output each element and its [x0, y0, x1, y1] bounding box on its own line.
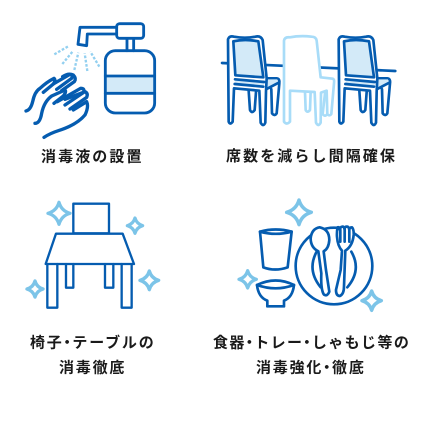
icon: plate and cutlery	[296, 227, 372, 304]
heading: disinfectant: 消毒液の設置	[41, 148, 144, 166]
panel: seats	[222, 36, 397, 165]
icon: cup	[260, 229, 292, 269]
heading: table line 1: 椅子・テーブルの	[30, 334, 156, 352]
icon: right chair	[339, 36, 390, 125]
icon: spray	[54, 46, 99, 71]
icon: pump bottle	[78, 24, 155, 113]
heading: seats: 席数を減らし間隔確保	[226, 147, 397, 165]
icon: table	[46, 204, 134, 308]
icon: sparkles	[239, 200, 381, 310]
icon: middle chair	[284, 36, 334, 125]
heading: tableware line 1: 食器・トレー・しゃもじ等の	[213, 334, 410, 352]
heading: table line 2: 消毒徹底	[59, 358, 126, 376]
icon: sparkles	[27, 202, 159, 297]
heading: tableware line 2: 消毒強化・徹底	[256, 358, 366, 376]
panel: disinfectant	[26, 24, 155, 166]
icon: left chair	[228, 36, 279, 125]
panel: tableware	[213, 200, 410, 376]
panel: table	[27, 202, 159, 376]
table edge	[222, 63, 395, 71]
icon: hands	[26, 74, 88, 137]
icon: bowl	[257, 280, 294, 306]
